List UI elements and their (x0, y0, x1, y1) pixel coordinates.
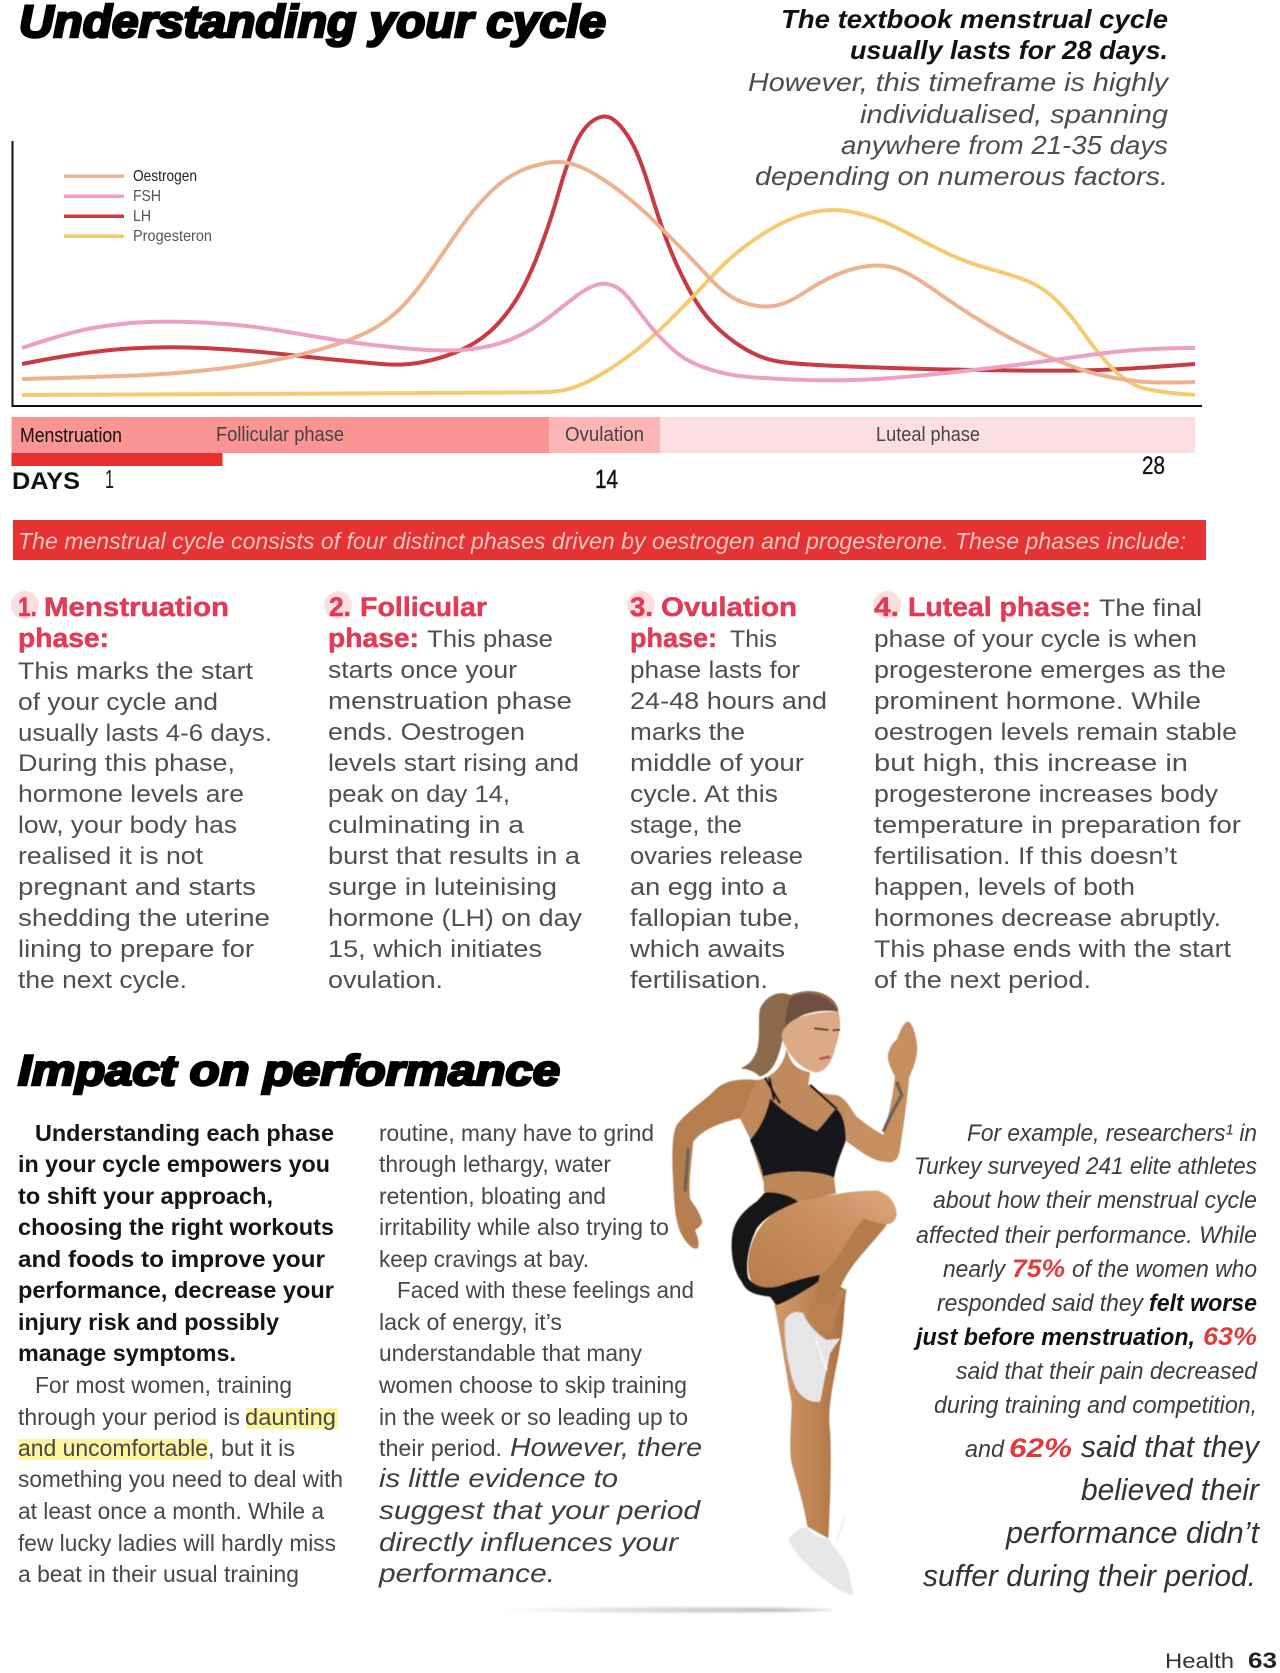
text column: routine: However, there (510, 1432, 702, 1462)
panel: luteal phase: 4. (874, 592, 899, 622)
panel: follicular phase: levels start rising and (328, 750, 579, 777)
panel: luteal phase: hormones decrease abruptly. (874, 905, 1221, 932)
phase timeline bar: Menstruation (20, 425, 122, 447)
panel: menstruation phase: During this phase, (18, 750, 235, 777)
text column: routine: irritability while also trying to (379, 1214, 669, 1240)
panel: ovulation phase: phase lasts for (630, 657, 800, 684)
text column: survey findings: believed their (1081, 1472, 1261, 1507)
panel: luteal phase: happen, levels of both (874, 874, 1135, 901)
phase timeline bar (12, 417, 1195, 466)
bold intro paragraph: to shift your approach, (18, 1183, 273, 1209)
panel: menstruation phase: lining to prepare for (18, 936, 254, 963)
neck and chest (740, 1048, 847, 1182)
panel: menstruation phase: hormone levels are (18, 781, 244, 808)
panel: follicular phase: 15, which initiates (328, 936, 542, 963)
panel: luteal phase: Luteal phase: (908, 592, 1091, 622)
raised shoe (785, 1312, 840, 1402)
intro text: individualised, spanning (860, 99, 1169, 129)
text column: understanding each phase: daunting (245, 1404, 336, 1430)
panel: menstruation phase: usually lasts 4-6 days. (18, 720, 272, 747)
heading: impact on performance: Impact on performance (18, 1047, 560, 1095)
lower shoe (788, 1527, 853, 1595)
days axis: 14 (595, 464, 618, 494)
panel: ovulation phase: middle of your (630, 750, 804, 777)
text column: survey findings: said that they (1081, 1429, 1261, 1464)
text column: survey findings: responded said they (937, 1290, 1145, 1317)
text column: routine: women choose to skip training (378, 1372, 687, 1398)
text column: understanding each phase: through your period is (18, 1404, 240, 1430)
panel: luteal phase (873, 591, 1241, 994)
panel: menstruation phase: realised it is not (18, 843, 203, 870)
panel: luteal phase: but high, this increase in (874, 750, 1188, 777)
bold intro paragraph (18, 1120, 334, 1366)
panel: ovulation phase: marks the (630, 719, 745, 746)
footer: section and page number (1165, 1648, 1277, 1673)
panel: luteal phase: This phase ends with the start (874, 936, 1231, 963)
chart legend (64, 168, 212, 245)
panel: menstruation phase: the next cycle. (18, 967, 187, 994)
days axis: DAYS (12, 468, 80, 495)
text column: survey findings: about how their menstrual cycle (933, 1187, 1257, 1214)
left arm (672, 1079, 758, 1249)
panel: follicular phase: ends. Oestrogen (328, 719, 525, 746)
text column: understanding each phase: something you need to deal with (18, 1466, 343, 1492)
shoelaces (815, 1337, 845, 1540)
chart legend: FSH (133, 188, 161, 205)
panel: ovulation phase: 3. (630, 592, 653, 622)
panel: menstruation phase: 1. (18, 592, 37, 622)
text column: survey findings: performance didn’t (1005, 1515, 1260, 1550)
panel: follicular phase: This phase (427, 626, 553, 653)
panel: ovulation phase: fallopian tube, (630, 905, 800, 932)
panel: menstruation phase (11, 591, 272, 994)
intro text: depending on numerous factors. (755, 161, 1168, 191)
text column: routine: retention, bloating and (379, 1183, 606, 1209)
bold intro paragraph: performance, decrease your (18, 1277, 334, 1303)
text column: survey findings: and (965, 1436, 1005, 1463)
text column: understanding each phase: few lucky ladies will hardly miss (18, 1530, 336, 1556)
raised thigh (748, 1191, 897, 1288)
panel: follicular phase: starts once your (328, 657, 517, 684)
panel: luteal phase: oestrogen levels remain stable (874, 719, 1237, 746)
panel: luteal phase: temperature in preparation for (874, 812, 1241, 839)
intro text: usually lasts for 28 days. (850, 35, 1168, 65)
panel: ovulation phase: Ovulation (661, 592, 797, 622)
sports bra (750, 1098, 846, 1178)
text column: routine: performance. (378, 1558, 555, 1588)
text column: survey findings: said that their pain decreased (956, 1358, 1258, 1385)
text column: survey findings (913, 1120, 1261, 1593)
text column: routine: suggest that your period (379, 1495, 702, 1525)
panel: ovulation phase: an egg into a (630, 874, 788, 901)
panel: luteal phase: phase of your cycle is when (874, 626, 1197, 653)
panel: follicular phase: hormone (LH) on day (328, 905, 582, 932)
intro text: However, this timeframe is highly (748, 67, 1170, 97)
bold intro paragraph: in your cycle empowers you (18, 1151, 330, 1177)
panel: follicular phase: Follicular (360, 592, 488, 622)
ground shadow (490, 1608, 834, 1612)
bold intro paragraph: injury risk and possibly (18, 1309, 279, 1335)
panel: luteal phase: fertilisation. If this doesn’t (874, 843, 1177, 870)
panel: follicular phase: culminating in a (328, 812, 525, 839)
text column: survey findings: of the women who (1072, 1256, 1257, 1283)
panel: follicular phase: menstruation phase (328, 688, 572, 715)
hormone line chart (12, 116, 1202, 406)
midriff (763, 1172, 836, 1202)
phase timeline bar: Ovulation (565, 424, 644, 446)
statistic: 62%: 62% (1009, 1433, 1072, 1463)
text column: survey findings: just before menstruation, (913, 1324, 1195, 1351)
bold intro paragraph: choosing the right workouts (18, 1214, 334, 1240)
chart legend: Oestrogen (133, 168, 197, 185)
text column: survey findings: during training and competition, (934, 1392, 1257, 1419)
panel: ovulation phase: This (730, 626, 777, 653)
raised lower shin (807, 1290, 846, 1337)
panel: follicular phase: peak on day 14, (328, 781, 510, 808)
panel: ovulation phase: fertilisation. (630, 967, 768, 994)
statistic: 63%: 63% (1203, 1323, 1257, 1351)
text column: routine: is little evidence to (379, 1463, 618, 1493)
text column: understanding each phase (18, 1120, 343, 1587)
panel: follicular phase: surge in luteinising (328, 874, 557, 901)
icon: athlete figure (490, 991, 917, 1612)
text column: survey findings: affected their performance. While (916, 1222, 1257, 1249)
panel: menstruation phase: phase: (18, 623, 109, 653)
text column: understanding each phase: at least once a month. While a (18, 1498, 325, 1524)
phase timeline bar: Follicular phase (216, 424, 344, 446)
text column: routine: understandable that many (379, 1340, 642, 1366)
panel: ovulation phase: ovaries release (630, 843, 803, 870)
panel: follicular phase: burst that results in a (328, 843, 581, 870)
text column: routine: in the week or so leading up to (379, 1404, 688, 1430)
footer: section and page number: 63 (1248, 1648, 1277, 1673)
text column: routine: lack of energy, it’s (379, 1309, 562, 1335)
phase timeline bar: Luteal phase (876, 424, 980, 446)
right arm (837, 1022, 917, 1162)
text column: routine: through lethargy, water (379, 1151, 611, 1177)
panel: ovulation phase: stage, the (630, 812, 742, 839)
tattoos (685, 1082, 902, 1192)
panel: ovulation phase: 24-48 hours and (630, 688, 827, 715)
panel: follicular phase: phase: (328, 623, 419, 653)
text column: routine: their period. (379, 1435, 502, 1461)
statistic: 75%: 75% (1012, 1255, 1065, 1283)
curve: oestrogen (22, 162, 1195, 382)
facial features (814, 1028, 840, 1030)
raised shin (817, 1215, 887, 1305)
panel: ovulation phase: cycle. At this (630, 781, 778, 808)
panel: luteal phase: of the next period. (874, 967, 1091, 994)
yellow highlight (18, 1408, 338, 1460)
intro text: The textbook menstrual cycle (781, 4, 1168, 34)
lower body (773, 1277, 853, 1595)
bold intro paragraph: manage symptoms. (18, 1340, 236, 1366)
text column: routine: keep cravings at bay. (379, 1246, 589, 1272)
red banner: The menstrual cycle consists of four distinct phases driven by oestrogen and progesterone. These phases include: (18, 528, 1186, 554)
shorts (732, 1192, 820, 1305)
crown hair (785, 994, 838, 1030)
curve: progesterone (22, 210, 1195, 395)
panel: menstruation phase: low, your body has (18, 812, 237, 839)
chart legend: Progesteron (133, 228, 212, 245)
text column: understanding each phase: For most women, training (35, 1372, 292, 1398)
text column: routine: routine, many have to grind (379, 1120, 654, 1146)
standing leg (773, 1277, 847, 1538)
panel: menstruation phase: pregnant and starts (18, 874, 256, 901)
panel: luteal phase: prominent hormone. While (874, 688, 1201, 715)
panel: luteal phase: progesterone emerges as the (874, 657, 1226, 684)
text column: survey findings: felt worse (1149, 1290, 1257, 1317)
intro text (748, 4, 1170, 191)
text column: routine: directly influences your (379, 1527, 680, 1557)
bold intro paragraph: Understanding each phase (35, 1120, 334, 1146)
days axis: 28 (1142, 452, 1165, 480)
footer: section and page number: Health (1165, 1650, 1234, 1673)
text column: survey findings: suffer during their period. (923, 1558, 1256, 1593)
bold intro paragraph: and foods to improve your (18, 1246, 325, 1272)
bra straps (765, 1078, 837, 1109)
panel: menstruation phase: This marks the start (18, 658, 253, 685)
panel: ovulation phase: phase: (630, 623, 717, 653)
ponytail (741, 991, 838, 1077)
panel: ovulation phase: which awaits (629, 936, 785, 963)
curve: LH (22, 116, 1195, 371)
text column: routine: Faced with these feelings and (397, 1277, 694, 1303)
days axis (12, 452, 1165, 495)
text column: understanding each phase: a beat in their usual training (18, 1561, 299, 1587)
intro text: anywhere from 21-35 days (841, 130, 1168, 160)
text column: understanding each phase: and uncomfortable (18, 1435, 208, 1461)
panel: menstruation phase: Menstruation (44, 592, 229, 622)
curve: FSH (22, 284, 1195, 380)
chart legend: LH (133, 208, 151, 225)
text column: understanding each phase: , but it is (208, 1435, 295, 1461)
panel: menstruation phase: of your cycle and (18, 689, 218, 716)
upper body (672, 991, 917, 1305)
text column: survey findings: Turkey surveyed 241 elite athletes (914, 1153, 1257, 1180)
panel: follicular phase (324, 591, 582, 994)
panel: luteal phase: The final (1099, 595, 1202, 622)
panel: menstruation phase: shedding the uterine (18, 905, 270, 932)
red banner (13, 520, 1206, 560)
text column: routine (378, 1120, 702, 1588)
text column: survey findings: For example, researchers¹ in (967, 1120, 1257, 1147)
panel: follicular phase: 2. (329, 592, 351, 622)
panel: follicular phase: ovulation. (328, 967, 443, 994)
panel: luteal phase: progesterone increases body (874, 781, 1218, 808)
text column: survey findings: nearly (943, 1256, 1007, 1283)
days axis: 1 (105, 464, 114, 494)
face (782, 1012, 840, 1072)
panel: ovulation phase (627, 591, 827, 994)
